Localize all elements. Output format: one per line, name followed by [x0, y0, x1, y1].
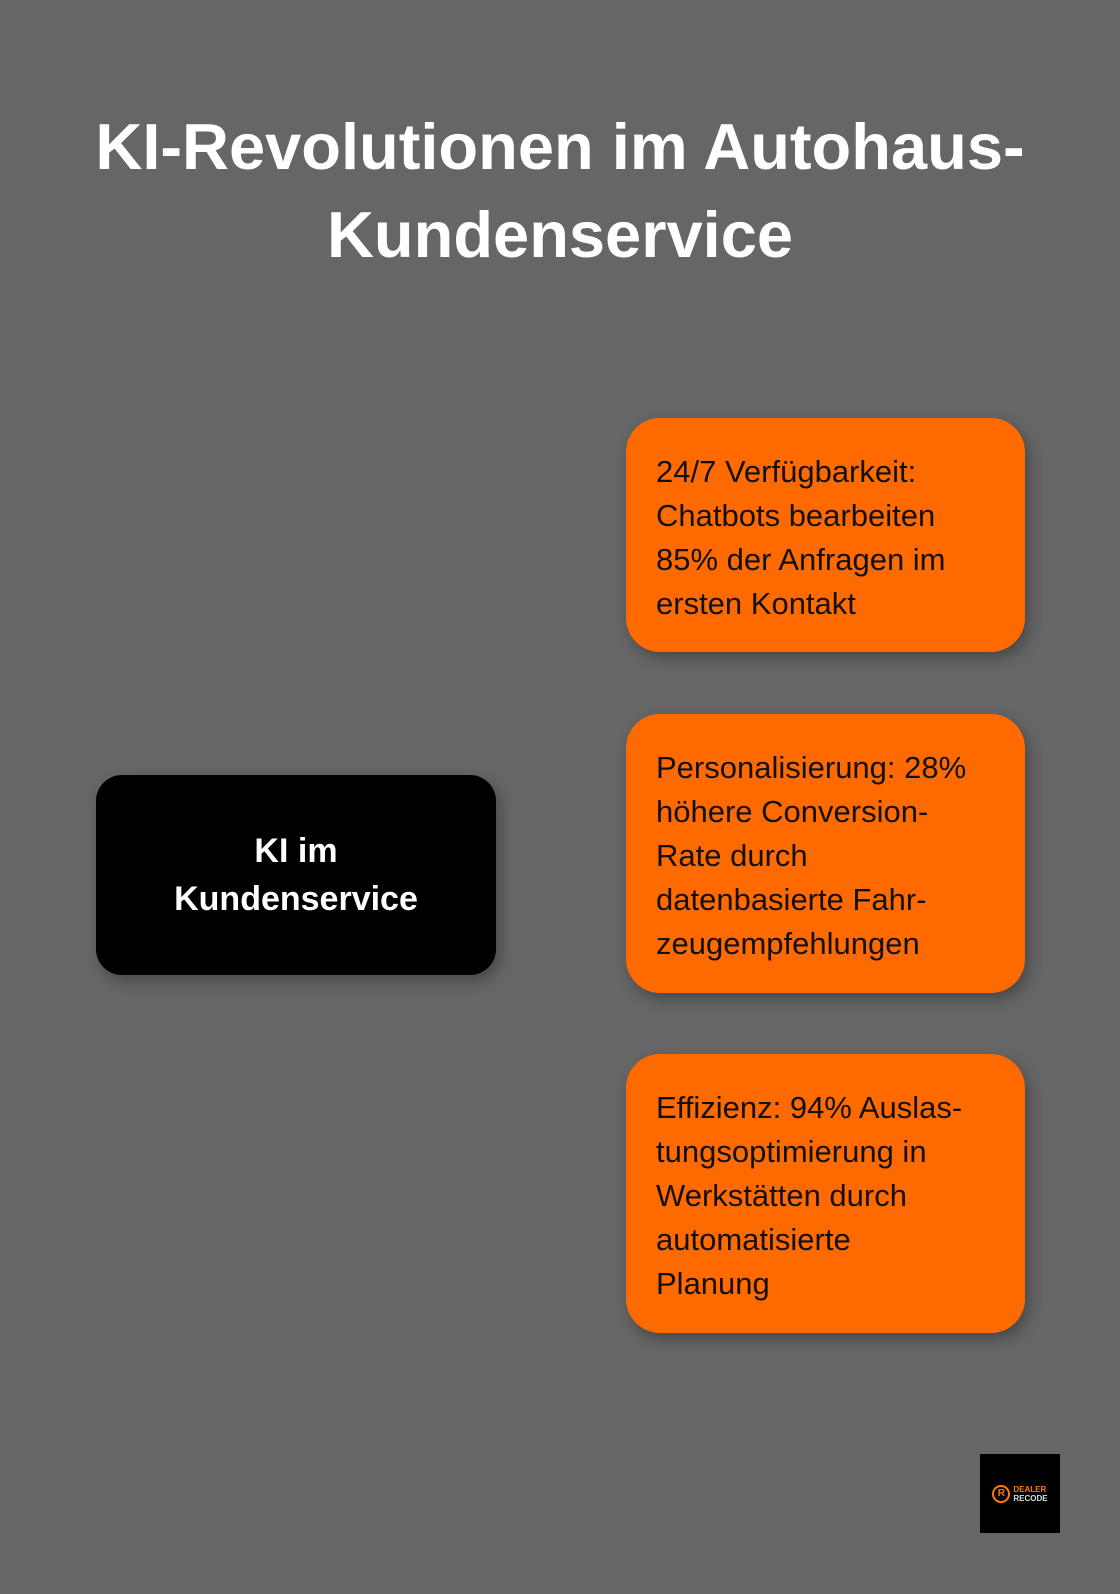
logo: DEALER — [1013, 1484, 1046, 1494]
logo — [980, 1454, 1060, 1533]
logo: RECODE — [1013, 1494, 1048, 1502]
central box: KI im — [254, 832, 338, 870]
card: personalization: datenbasierte Fahr- — [656, 882, 927, 917]
card: efficiency: Planung — [656, 1266, 770, 1301]
card: efficiency: tungsoptimierung in — [656, 1134, 927, 1169]
card: personalization: Rate durch — [656, 838, 808, 873]
card: efficiency: Werkstätten durch — [656, 1178, 907, 1213]
card: availability: Chatbots bearbeiten — [656, 498, 935, 533]
card: personalization: zeugempfehlungen — [656, 926, 920, 961]
card: efficiency: automatisierte — [656, 1222, 851, 1257]
central box — [96, 775, 496, 975]
card: availability: 24/7 Verfügbarkeit: — [656, 454, 916, 489]
card: personalization: Personalisierung: 28% — [656, 750, 966, 785]
title: KI-Revolutionen im Autohaus- — [95, 110, 1025, 183]
card: personalization: höhere Conversion- — [656, 794, 928, 829]
card: availability — [626, 418, 1025, 652]
title: Kundenservice — [327, 198, 793, 271]
card: efficiency — [626, 1054, 1025, 1333]
card: availability: 85% der Anfragen im — [656, 542, 946, 577]
central box: Kundenservice — [174, 880, 418, 918]
card: efficiency: Effizienz: 94% Auslas- — [656, 1090, 962, 1125]
logo: R — [998, 1488, 1005, 1498]
card: availability: ersten Kontakt — [656, 586, 856, 621]
title — [95, 110, 1025, 271]
card: personalization — [626, 714, 1025, 993]
